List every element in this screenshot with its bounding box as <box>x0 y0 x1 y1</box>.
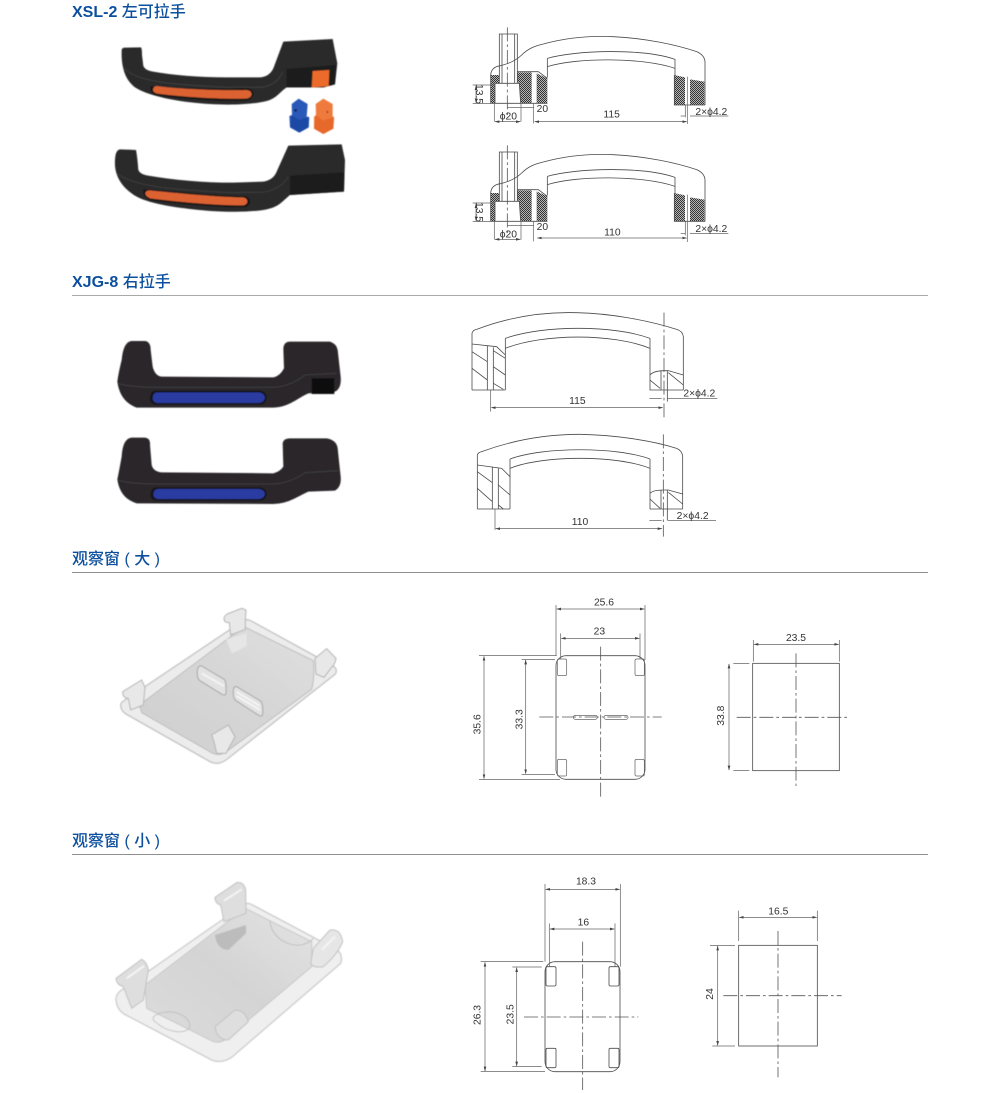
drawing: small window body: 16 <box>578 918 589 929</box>
drawing: 115 handle: 20 <box>537 104 548 115</box>
photo: large window <box>121 608 336 763</box>
drawing: small window body: 26.3 <box>472 1005 483 1025</box>
drawing: large cut-out: 33.8 <box>716 705 727 726</box>
heading: XSL-2: XSL-2 左可拉手 <box>72 2 186 21</box>
drawing: 110 handle: 110 <box>604 228 621 239</box>
handle with blank end <box>115 144 345 212</box>
drawing: large cut-out <box>716 633 850 786</box>
plate <box>121 620 336 763</box>
drawing: small window body <box>472 876 638 1090</box>
drawing: 110 handle: 20 <box>537 222 548 233</box>
drawing: window body <box>473 598 662 797</box>
drawing: 110 right handle: 110 <box>572 517 588 528</box>
handle with square hole <box>117 341 341 408</box>
blue plug <box>289 99 309 133</box>
drawing: 115 right handle: 115 <box>569 396 586 407</box>
photo: small window <box>116 883 343 1061</box>
drawing: window body: 35.6 <box>473 714 484 734</box>
heading: XJG-8: XJG-8 右拉手 <box>72 272 171 291</box>
drawing: 115 handle: 115 <box>603 109 620 120</box>
drawing: 110 right handle <box>477 434 716 537</box>
plate <box>116 903 341 1061</box>
slot ribs <box>202 673 260 710</box>
drawing: XJG-8 dimension drawings <box>472 313 717 537</box>
drawing: XSL-2 dimension drawings <box>473 27 728 242</box>
drawing: small window body: 23.5 <box>506 1004 517 1024</box>
clip reflection <box>215 925 246 950</box>
photo: XJG-8 handles <box>117 341 341 504</box>
drawing: large window dimensions <box>473 598 850 797</box>
drawing: small window dimensions <box>472 876 842 1090</box>
drawing: small cut-out: 16.5 <box>768 906 789 917</box>
heading: large window: 观察窗 ( 大 ) <box>72 550 160 568</box>
drawing: 110 right handle: 2×ϕ4.2 <box>677 511 709 522</box>
drawing: 115 handle: ϕ20 <box>500 111 517 122</box>
plate inner <box>145 908 312 1042</box>
drawing: 115 right handle <box>472 313 717 418</box>
orange plug <box>314 99 334 134</box>
drawing: 115 right handle: 2×ϕ4.2 <box>683 389 716 400</box>
handle with orange cap <box>122 39 337 105</box>
drawing: window body: 33.3 <box>515 709 526 729</box>
drawing: 110 handle: 13.5 <box>473 202 484 222</box>
drawing: 110 handle: ϕ20 <box>500 229 517 240</box>
clip ribs <box>127 889 335 978</box>
handle with blank end <box>117 438 341 504</box>
plate inner <box>139 627 314 755</box>
drawing: 115 handle: 13.5 <box>473 84 484 104</box>
corner marks <box>153 922 313 1032</box>
clips <box>116 883 343 1040</box>
drawing: large cut-out: 23.5 <box>786 633 806 644</box>
drawing: small cut-out <box>705 906 842 1077</box>
drawing: 115 handle: 2×ϕ4.2 <box>695 107 728 118</box>
slots <box>197 666 263 716</box>
drawing: window body: 25.6 <box>594 598 614 609</box>
drawing: window body: 23 <box>594 626 605 637</box>
heading: small window: 观察窗 ( 小 ) <box>72 832 160 850</box>
drawing: 110 handle: 2×ϕ4.2 <box>695 224 728 235</box>
drawing: small cut-out: 24 <box>705 988 716 1000</box>
drawing: small window body: 18.3 <box>576 876 596 887</box>
clips <box>123 608 336 753</box>
drawing: 115 handle <box>473 27 728 124</box>
clip reflection <box>226 633 247 653</box>
drawing: 110 handle <box>473 145 728 242</box>
photo: XSL-2 handles <box>115 39 345 212</box>
